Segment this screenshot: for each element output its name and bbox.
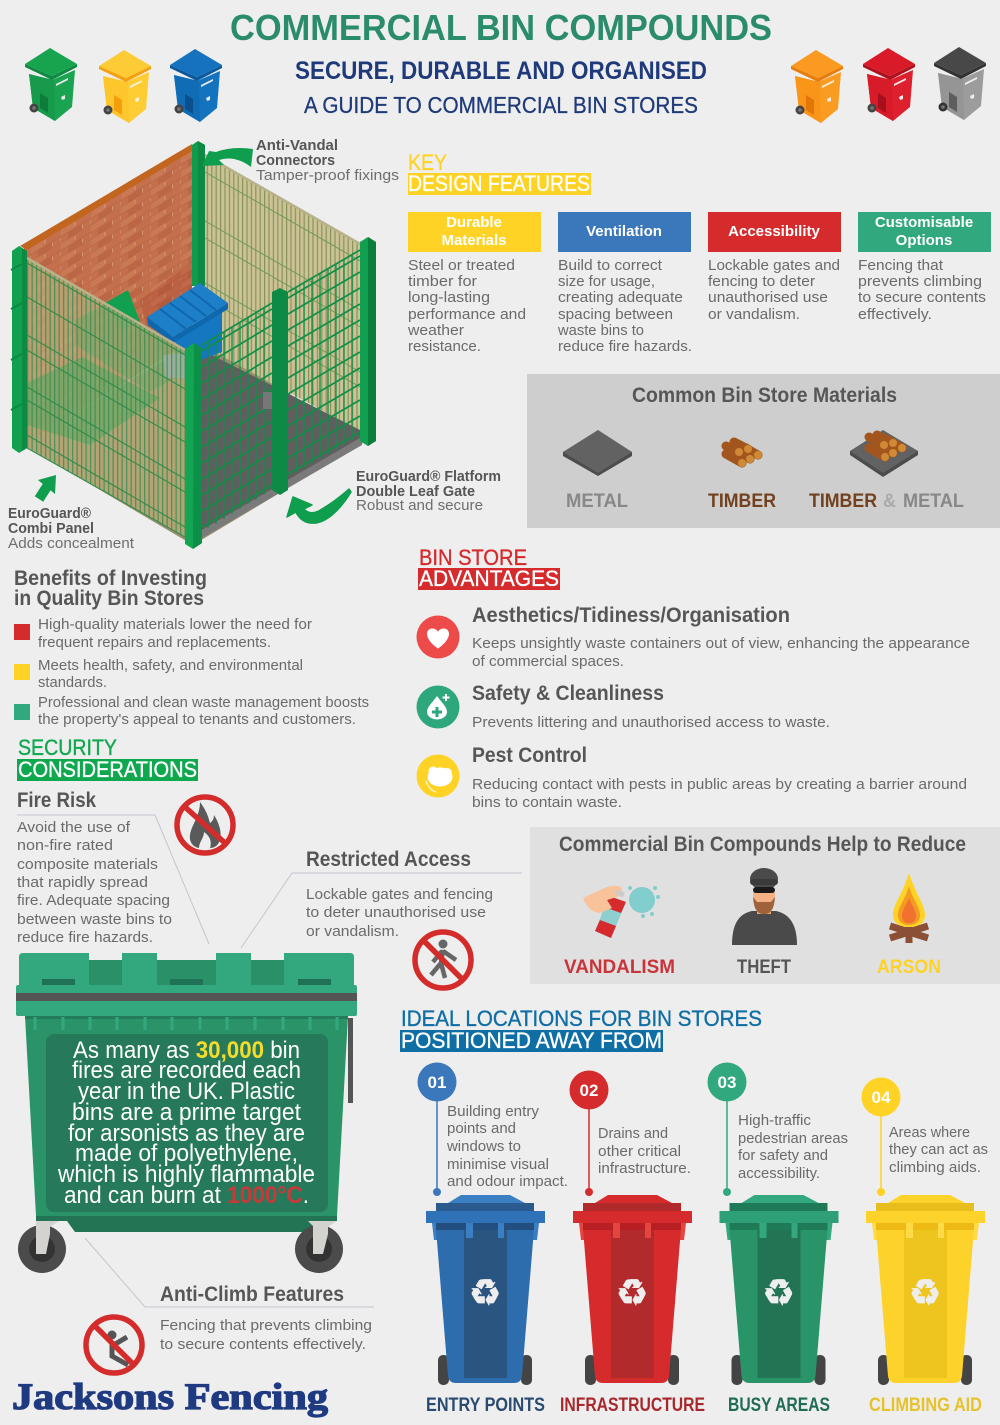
icon: yellow wheelie bin [99, 50, 151, 123]
icon: pest [416, 754, 460, 798]
text: busy areas: High-traffic [738, 1112, 812, 1129]
heading: bin store advantages: BIN STORE [419, 545, 527, 570]
advantage: aesthetics: of commercial spaces. [472, 653, 624, 670]
text: infrastructure: other critical [598, 1143, 681, 1160]
heading: ideal locations: POSITIONED AWAY FROM [401, 1028, 662, 1053]
text: busy areas: pedestrian areas [738, 1130, 848, 1147]
card: ventilation: Build to correct [558, 257, 663, 274]
callout: fire risk: non-fire rated [17, 837, 113, 854]
callout: flatform gate: Double Leaf Gate [356, 484, 475, 500]
advantage: safety and cleanliness [472, 682, 830, 731]
marker: 02 [570, 1070, 608, 1196]
panel: security considerations [17, 735, 522, 988]
callout: anti-vandal connectors: Anti-Vandal [256, 138, 338, 154]
text: infrastructure: Drains and [598, 1125, 668, 1142]
panel: benefits of investing [14, 567, 369, 728]
bin: yellow climbing aid [866, 1195, 985, 1385]
card: customisable options: prevents climbing [858, 273, 982, 290]
text: entry points [446, 1103, 568, 1190]
callout: bin fire statistic: for arsonists as they are [68, 1120, 305, 1147]
icon: thief [732, 868, 797, 945]
card: customisable options: Options [896, 232, 952, 249]
label: entry points: ENTRY POINTS [426, 1395, 545, 1416]
text: busy areas: for safety and [738, 1147, 828, 1164]
card: durable materials: Durable [446, 214, 502, 231]
benefit: standards: Meets health, safety, and environmental [38, 657, 303, 674]
heading: bin store advantages: ADVANTAGES [419, 566, 559, 591]
bin: blue entry points: ♻ [469, 1273, 501, 1314]
icon: green wheelie bin [25, 48, 77, 121]
benefit: standards [14, 657, 303, 691]
heading: security considerations: CONSIDERATIONS [18, 757, 197, 782]
card: durable materials: weather [407, 322, 464, 339]
icon: heart [416, 616, 460, 658]
card: durable materials: Steel or treated [408, 257, 515, 274]
marker: 02: 02 [580, 1081, 598, 1100]
icon: red wheelie bin [863, 48, 915, 121]
callout: fire risk: Fire Risk [17, 789, 96, 812]
label: busy areas: BUSY AREAS [728, 1395, 830, 1416]
benefit: appeal [14, 694, 369, 728]
marker: 04 [862, 1078, 900, 1196]
card: ventilation: waste bins to [557, 322, 644, 339]
callout: anti-climb features [85, 1238, 374, 1353]
heading: bin store advantages [418, 545, 560, 591]
advantage: pest control: bins to contain waste. [472, 794, 622, 811]
tagline: A GUIDE TO COMMERCIAL BIN STORES [304, 92, 698, 118]
title: COMMERCIAL BIN COMPOUNDS [230, 7, 772, 48]
icon: spray can [583, 886, 660, 938]
icon: grey wheelie bin [934, 47, 986, 120]
bin: green busy areas [720, 1195, 838, 1385]
benefit: repairs: frequent repairs and replacements. [38, 634, 271, 651]
callout: fire risk: fire. Adequate spacing [17, 892, 170, 909]
callout: fire risk [17, 789, 209, 946]
arrow: flatform gate [287, 489, 351, 523]
callout: combi panel: Combi Panel [8, 521, 94, 537]
callout: restricted access [241, 848, 522, 948]
callout: fire risk: Avoid the use of [17, 819, 131, 836]
advantage: pest control: Pest Control [472, 744, 587, 767]
label: timber and metal: METAL [903, 491, 964, 512]
card: customisable options: to secure contents [858, 289, 986, 306]
heading: help to reduce: Commercial Bin Compounds Help to Reduce [559, 833, 966, 856]
marker: 01 [418, 1062, 456, 1196]
heading: security considerations [17, 735, 198, 782]
advantage: pest control [472, 744, 967, 811]
callout: restricted access: or vandalism. [306, 923, 399, 940]
text: climbing aid: climbing aids. [889, 1159, 981, 1176]
heading: ideal locations [400, 1006, 762, 1053]
card: customisable options: Fencing that [858, 257, 944, 274]
bin: red infrastructure: ♻ [616, 1273, 648, 1314]
callout: anti-climb features: to secure contents effectively. [160, 1336, 366, 1353]
callout: fire risk: between waste bins to [17, 911, 172, 928]
icon: timber on metal [850, 430, 918, 477]
panel: key design features [407, 150, 991, 355]
arrow: anti-vandal connectors [202, 148, 253, 167]
advantage: safety and cleanliness: Safety & Cleanliness [472, 682, 664, 705]
text: entry points: and odour impact. [447, 1173, 568, 1190]
callout: anti-climb features: Anti-Climb Features [160, 1283, 344, 1306]
large green bin [16, 953, 357, 1273]
callout: bin fire statistic: which is highly flammable [57, 1161, 315, 1188]
icon: fire [890, 873, 928, 943]
heading: ideal locations: IDEAL LOCATIONS FOR BIN STORES [401, 1006, 762, 1031]
card: accessibility: unauthorised use [708, 289, 828, 306]
callout: bin fire statistic: bins are a prime target [72, 1099, 301, 1126]
label: climbing aid: CLIMBING AID [869, 1395, 982, 1416]
text: entry points: windows to [446, 1138, 521, 1155]
callout: bin fire statistic: year in the UK. Plastic [78, 1078, 295, 1105]
benefit: repairs [14, 616, 312, 651]
text: entry points: points and [447, 1120, 516, 1137]
advantage: aesthetics: Aesthetics/Tidiness/Organisation [472, 604, 790, 627]
card: ventilation: size for usage, [558, 273, 655, 290]
bin: yellow climbing aid: ♻ [909, 1273, 941, 1314]
bin: green busy areas: ♻ [762, 1273, 795, 1314]
text: entry points: Building entry [447, 1103, 540, 1120]
benefit: repairs: High-quality materials lower the need for [38, 616, 312, 633]
illustration: fenced bin compound [11, 141, 376, 549]
callout: restricted access: Restricted Access [306, 848, 471, 871]
wheel: right [295, 1221, 343, 1273]
text: busy areas: accessibility. [738, 1165, 820, 1182]
callout: flatform gate [356, 469, 501, 514]
callout: bin fire statistic: As many as 30,000 bin [73, 1037, 300, 1064]
card: ventilation: Ventilation [586, 223, 662, 240]
card: durable materials: Materials [441, 232, 507, 249]
label: timber and metal: & [883, 491, 896, 512]
callout: combi panel: Adds concealment [8, 535, 135, 552]
card: accessibility [708, 212, 841, 323]
heading: benefits: in Quality Bin Stores [14, 587, 204, 610]
heading: benefits: Benefits of Investing [14, 567, 207, 590]
text: busy areas [738, 1112, 848, 1182]
heading: materials: Common Bin Store Materials [632, 384, 897, 407]
label: timber: TIMBER [708, 491, 776, 512]
card: customisable options: Customisable [875, 214, 973, 231]
callout: restricted access: Lockable gates and fencing [306, 886, 493, 903]
card: ventilation [557, 212, 692, 355]
card: durable materials: timber for [408, 273, 477, 290]
benefit: appeal: the property's appeal to tenants and customers. [38, 711, 356, 728]
card: ventilation: reduce fire hazards. [558, 338, 692, 355]
callout: flatform gate: Robust and secure [356, 497, 483, 514]
marker: 03: 03 [718, 1073, 736, 1092]
arrow: combi panel [38, 475, 56, 499]
heading: key design features: KEY [408, 150, 447, 175]
icon: no climbing [86, 1317, 142, 1373]
card: accessibility: fencing to deter [708, 273, 815, 290]
logo: Jacksons Fencing: Jacksons Fencing [12, 1377, 329, 1418]
callout: anti-climb features: Fencing that prevents climbing [160, 1317, 372, 1334]
card: durable materials [407, 212, 541, 355]
label: infrastructure: INFRASTRUCTURE [560, 1395, 705, 1416]
marker: 04: 04 [872, 1088, 891, 1107]
text: infrastructure [598, 1125, 691, 1177]
callout: anti-vandal connectors: Tamper-proof fixings [256, 167, 399, 184]
label: metal: METAL [566, 491, 628, 512]
benefit: standards: standards. [38, 674, 107, 691]
callout: bin fire statistic: fires are recorded each [72, 1057, 301, 1084]
panel: bin store advantages [416, 545, 970, 811]
callout: combi panel: EuroGuard® [8, 506, 91, 522]
card: accessibility: Accessibility [728, 223, 821, 240]
icon: blue wheelie bin [170, 49, 222, 122]
callout: fire risk: composite materials [17, 856, 158, 873]
text: climbing aid: they can act as [889, 1141, 988, 1158]
marker: 03 [708, 1062, 746, 1196]
advantage: aesthetics: Keeps unsightly waste containers out of view, enhancing the appearance [472, 635, 970, 652]
card: customisable options [858, 212, 991, 323]
advantage: safety and cleanliness: Prevents littering and unauthorised access to waste. [472, 714, 830, 731]
callout: anti-vandal connectors: Connectors [256, 153, 335, 169]
icon: no fire [177, 797, 233, 853]
benefit: appeal: Professional and clean waste management boosts [38, 694, 369, 711]
label: theft: THEFT [737, 957, 791, 978]
callout: bin fire statistic: and can burn at 1000°C. [64, 1182, 309, 1209]
icon: metal sheet [563, 430, 632, 476]
heading: key design features: DESIGN FEATURES [408, 171, 590, 196]
wheel: left [18, 1221, 66, 1273]
text: infrastructure: infrastructure. [598, 1160, 691, 1177]
marker: 01: 01 [428, 1073, 446, 1092]
advantage: aesthetics [472, 604, 970, 670]
callout: fire risk: reduce fire hazards. [17, 929, 153, 946]
heading: security considerations: SECURITY [18, 735, 117, 760]
advantage: pest control: Reducing contact with pests in public areas by creating a barrier around [472, 776, 967, 793]
heading: benefits [14, 567, 207, 610]
label: vandalism: VANDALISM [564, 957, 675, 978]
card: accessibility: Lockable gates and [708, 257, 840, 274]
callout: bin fire statistic [57, 1037, 315, 1209]
text: climbing aid: Areas where [889, 1124, 970, 1141]
icon: no entry person [415, 932, 471, 988]
label: timber and metal [809, 491, 964, 512]
card: ventilation: creating adequate [558, 289, 683, 306]
icon: orange wheelie bin [791, 50, 843, 123]
panel: common bin store materials [527, 374, 1000, 528]
callout: restricted access: to deter unauthorised use [306, 904, 486, 921]
card: durable materials: resistance. [408, 338, 481, 355]
callout: anti-vandal connectors [256, 138, 399, 184]
card: accessibility: or vandalism. [708, 306, 800, 323]
label: timber and metal: TIMBER [809, 491, 877, 512]
card: ventilation: spacing between [558, 306, 673, 323]
card: durable materials: long-lasting [408, 289, 490, 306]
text: entry points: minimise visual [447, 1156, 549, 1173]
callout: combi panel [8, 506, 135, 552]
card: customisable options: effectively. [858, 306, 932, 323]
subtitle: SECURE, DURABLE AND ORGANISED [295, 57, 707, 85]
text: climbing aid [889, 1124, 988, 1176]
card: durable materials: performance and [408, 306, 526, 323]
heading: key design features [408, 150, 591, 196]
callout: fire risk: that rapidly spread [17, 874, 148, 891]
bin: red infrastructure [573, 1195, 692, 1385]
callout: bin fire statistic: made of polyethylene, [75, 1140, 298, 1167]
label: arson: ARSON [877, 957, 941, 978]
callout: flatform gate: EuroGuard® Flatform [356, 469, 501, 485]
icon: cleanliness drop [416, 686, 460, 728]
panel: ideal locations [400, 1006, 988, 1416]
bin: blue entry points [426, 1195, 545, 1385]
icon: timber logs [726, 442, 762, 467]
panel: help to reduce [530, 827, 1000, 984]
